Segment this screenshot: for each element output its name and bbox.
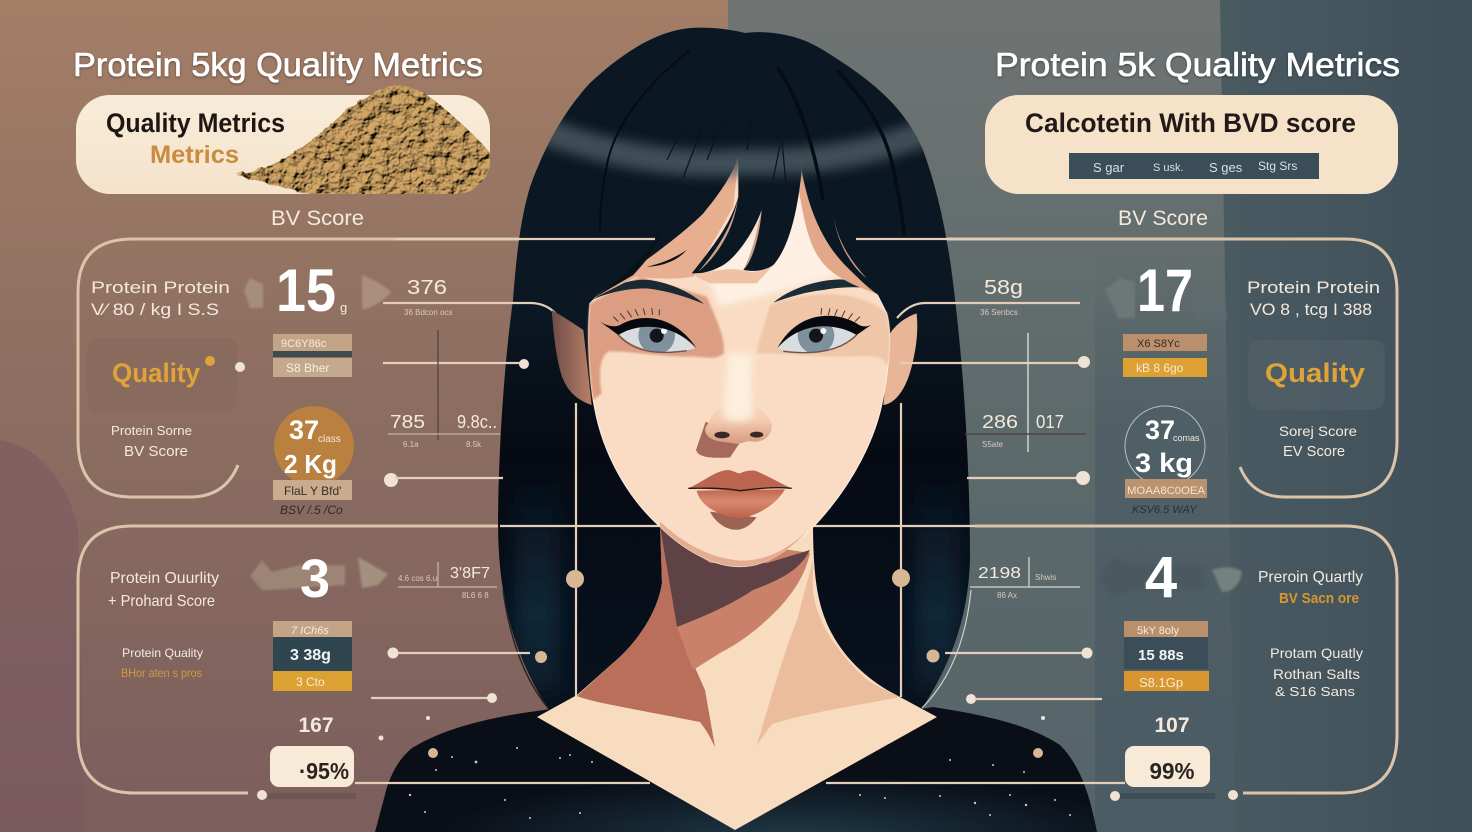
center bang — [692, 100, 802, 273]
stacked bars: 5kY 8oly — [1137, 625, 1179, 637]
right eyebrow — [773, 279, 875, 303]
right header pill — [985, 95, 1398, 194]
stats 785 / 9.8c: 6.1a — [403, 440, 419, 449]
protein quality small label: Protam Quatly — [1270, 645, 1363, 661]
stacked bars: 15 88s — [1138, 647, 1184, 664]
mouth — [688, 470, 792, 530]
peach hairline shading — [593, 157, 738, 298]
score 3 with arrows — [250, 549, 388, 609]
connector dots — [371, 648, 547, 758]
panel: left lower metrics — [108, 549, 547, 800]
stats 286 / 017 — [982, 412, 1064, 449]
quality label: Quality — [112, 358, 200, 388]
protein quality small label: Protein Quality — [122, 646, 203, 660]
stacked bars: 3 38g — [290, 647, 331, 664]
stacked bars — [1124, 621, 1209, 691]
stat 2198: 86 Ax — [997, 591, 1017, 600]
protein label: Protein Protein — [1247, 278, 1380, 297]
quality label: Quality — [1265, 358, 1365, 388]
stacked bars: 3 Cto — [296, 675, 325, 689]
panel outlines and connector lines — [78, 239, 1397, 793]
circle stat 37 / 2 Kg: 37 — [289, 415, 319, 445]
right eye — [777, 308, 873, 354]
circle stat 37 / 2 Kg: class — [318, 434, 341, 445]
dark legend strip: S ges — [1209, 160, 1243, 175]
hair gloss and strands — [535, 50, 945, 235]
right bang — [802, 100, 923, 303]
face — [552, 163, 917, 567]
score label: Protein Sorne — [111, 423, 192, 438]
score 4 with arrows: 4 — [1145, 545, 1177, 610]
score 15 with arrows: 15 — [276, 257, 336, 324]
pill heading: Quality Metrics — [106, 108, 285, 138]
circle stat 37 / 2 Kg: FlaL Y Bfd' — [284, 484, 341, 498]
panel: right lower metrics — [926, 545, 1363, 801]
stacked bars: 9C6Y86c — [281, 338, 327, 350]
stat 3'8F7: 3'8F7 — [450, 565, 490, 582]
score 17 with arrows: 17 — [1137, 257, 1193, 324]
protein quality small label: Rothan Salts — [1273, 666, 1360, 682]
stat 58g — [980, 277, 1023, 317]
stat 376: 376 — [407, 277, 447, 299]
panel: left upper metrics — [91, 257, 529, 517]
protein quality small label: BHor aten s pros — [121, 666, 202, 680]
dark legend strip: Stg Srs — [1258, 159, 1297, 173]
callout 99% — [1125, 746, 1210, 787]
left header pill with powder — [76, 85, 490, 194]
score 15 with arrows — [244, 257, 391, 324]
stats 785 / 9.8c: 8.5k — [466, 440, 482, 449]
circle stat 37 / 3 kg: 3 kg — [1135, 448, 1193, 478]
value 167: 167 — [298, 714, 334, 737]
score 17 with arrows — [1105, 257, 1228, 324]
protein label: Protein Protein — [91, 278, 230, 297]
stat 376 — [404, 277, 452, 317]
score 4 with arrows — [1100, 545, 1242, 610]
protein quality small label — [121, 646, 203, 680]
circle stat 37 / 3 kg: KSV6.5 WAY — [1132, 504, 1197, 516]
stat 376: 36 Bdcon ocs — [404, 308, 452, 317]
circle stat 37 / 2 Kg — [273, 406, 354, 517]
score label: BV Score — [124, 443, 188, 460]
stats 785 / 9.8c — [388, 412, 500, 449]
circle stat 37 / 3 kg — [1125, 406, 1207, 516]
circle stat 37 / 2 Kg: BSV /.5 /Co — [280, 503, 343, 517]
circle stat 37 / 3 kg: 37 — [1145, 415, 1175, 445]
score label — [1279, 423, 1357, 460]
stacked bars — [273, 621, 352, 691]
stacked bars: S8 Bher — [286, 361, 329, 375]
stacked bars — [1123, 334, 1207, 377]
hair back — [498, 28, 971, 712]
stat 3'8F7: 8L6 6 8 — [462, 591, 489, 600]
stats 286 / 017: 286 — [982, 412, 1018, 432]
figure: woman portrait — [355, 28, 1125, 832]
score 3 with arrows: 3 — [300, 549, 330, 609]
left ear — [552, 310, 592, 405]
stats 286 / 017: S5ate — [982, 440, 1003, 449]
protein quality label: + Prohard Score — [108, 593, 215, 610]
black top — [355, 707, 1125, 832]
stat 3'8F7 — [398, 562, 497, 600]
stat 58g: 36 Senbcs — [980, 308, 1018, 317]
stacked bars: S8.1Gp — [1139, 675, 1183, 690]
nose — [705, 353, 772, 444]
protein label — [91, 278, 230, 319]
protein quality label: BV Sacn ore — [1279, 590, 1359, 607]
callout 99%: 99% — [1150, 758, 1194, 784]
score label — [111, 423, 192, 460]
protein quality label: Protein Ouurlity — [110, 570, 219, 587]
left title: Protein 5kg Quality Metrics — [73, 46, 483, 83]
stats 785 / 9.8c: 9.8c.. — [457, 412, 497, 432]
stat 58g: 58g — [984, 277, 1023, 299]
protein quality small label — [1270, 645, 1363, 699]
protein label — [1247, 278, 1380, 319]
callout 95% — [270, 746, 354, 787]
fringe — [540, 100, 923, 303]
left cheek shadow — [588, 277, 724, 400]
pill subheading: Metrics — [150, 141, 239, 169]
score label: EV Score — [1283, 443, 1345, 460]
protein quality label — [1258, 569, 1363, 607]
stacked bars — [273, 334, 352, 377]
protein label: VO 8 , tcg I 388 — [1250, 300, 1372, 319]
forehead light — [707, 193, 860, 307]
left eye — [600, 308, 697, 354]
right title: Protein 5k Quality Metrics — [995, 46, 1400, 83]
stat 2198 — [970, 557, 1080, 600]
stats 286 / 017: 017 — [1036, 412, 1064, 432]
stat 2198: Shwis — [1035, 573, 1056, 582]
connector over hair — [395, 238, 1000, 240]
protein label: V⁄ 80 / kg I S.S — [91, 300, 219, 319]
nose shadow — [696, 422, 742, 458]
circle stat 37 / 3 kg: MOAA8C0OEA — [1127, 485, 1206, 497]
stat 2198: 2198 — [978, 565, 1021, 582]
icon: protein powder pile — [237, 85, 490, 194]
protein quality small label: & S16 Sans — [1275, 684, 1356, 699]
left BV Score label: BV Score — [271, 207, 364, 230]
right header pill: Calcotetin With BVD score — [1025, 108, 1356, 138]
dark legend strip — [1069, 153, 1319, 179]
value 107: 107 — [1154, 714, 1190, 737]
stacked bars: kB 8 6go — [1136, 361, 1184, 375]
left eyebrow — [593, 280, 704, 304]
fine strands — [593, 230, 687, 298]
skin — [589, 163, 890, 567]
stacked bars: 7 ICh6s — [291, 625, 329, 637]
left bang — [540, 100, 740, 300]
chin shadow — [660, 522, 807, 567]
score 15 with arrows: g — [340, 300, 347, 315]
score label: Sorej Score — [1279, 423, 1357, 439]
dark legend strip: S usk. — [1153, 162, 1184, 174]
connector dots — [926, 648, 1102, 758]
right cheek shadow — [757, 294, 890, 367]
callout 95%: ·95% — [299, 758, 349, 784]
circle stat 37 / 3 kg: comas — [1173, 433, 1200, 443]
connector lines over hair — [383, 303, 1080, 697]
stats 785 / 9.8c: 785 — [390, 412, 425, 432]
connector lines — [900, 333, 1090, 485]
protein quality label — [108, 570, 219, 610]
stacked bars: X6 S8Yc — [1137, 338, 1180, 350]
dark legend strip: S gar — [1093, 160, 1125, 175]
panel: right upper metrics — [900, 257, 1380, 516]
stat 3'8F7: 4.6 cos 6.u — [398, 574, 437, 583]
neck and chest — [537, 520, 937, 830]
circle stat 37 / 2 Kg: 2 Kg — [284, 449, 337, 479]
right BV Score label: BV Score — [1118, 207, 1208, 230]
protein quality label: Preroin Quartly — [1258, 569, 1363, 586]
right ear — [883, 313, 917, 405]
